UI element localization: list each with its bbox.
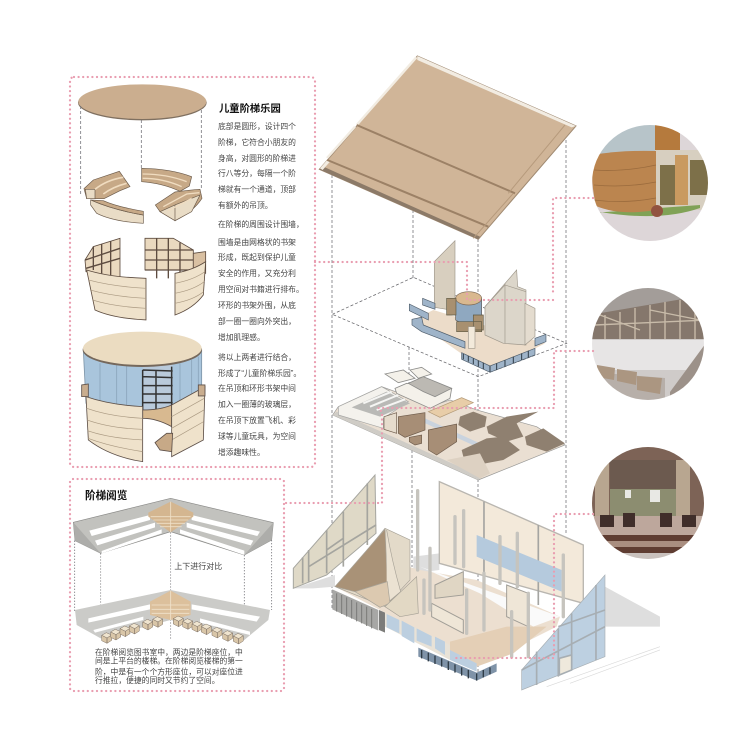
photo: children's playground render xyxy=(590,125,710,241)
ground shadows xyxy=(293,553,660,627)
columns xyxy=(418,491,563,657)
connector: shelf photo to reading panel xyxy=(284,351,593,503)
panel border xyxy=(70,77,315,467)
caption xyxy=(95,647,243,685)
furniture clusters xyxy=(458,412,565,465)
floor plane outline xyxy=(332,277,567,377)
dashed guide lines xyxy=(81,106,201,196)
slab xyxy=(333,387,565,480)
diagram: cylinder assembly xyxy=(78,84,207,462)
text block: description: 安全的作用，又充分利 xyxy=(218,268,296,278)
caption: 阶，中是有一个个方形座位，可以对座位进 xyxy=(95,666,243,676)
text block: description: 有额外的吊顶。 xyxy=(218,200,273,210)
heading: children's playground: 儿童阶梯乐园 xyxy=(219,102,281,115)
connector: lounge photo to ground floor xyxy=(455,514,593,658)
text block: description: 梯就有一个通道，顶部 xyxy=(218,184,296,194)
heading: stepped reading: 阶梯阅览 xyxy=(85,489,128,502)
photo: lounge view xyxy=(590,445,706,561)
text block: description: 在吊顶和环形书架中间 xyxy=(218,383,296,393)
panel: children's stepped playground xyxy=(70,77,315,467)
text block: description: 底部是圆形，设计四个 xyxy=(218,121,296,131)
entrance railing xyxy=(418,648,497,681)
text block: description: 身高，对圆形的阶梯进 xyxy=(218,153,296,163)
back wall xyxy=(439,482,583,605)
text block: description: 形成，既起到保护儿童 xyxy=(218,252,296,262)
text block: description: 在吊顶下放置飞机、彩 xyxy=(218,415,296,425)
text block: description: 在阶梯的周围设计围墙， xyxy=(218,219,304,229)
text block: description: 增加肌理感。 xyxy=(218,332,265,342)
stepped seats xyxy=(84,168,202,223)
glass and shelf assembly xyxy=(82,332,205,462)
ground floor level xyxy=(293,475,660,690)
lower stair view with seats xyxy=(75,590,270,644)
text block: description: 球等儿童玩具，为空间 xyxy=(218,431,296,441)
second floor level: children's area xyxy=(332,241,567,377)
roof slab xyxy=(319,56,576,239)
text block: description: 加入一圈薄的玻璃层， xyxy=(218,399,296,409)
dashed guides xyxy=(75,532,272,640)
caption: 间是上平台的楼梯。在阶梯阅览楼梯的第一 xyxy=(95,656,243,666)
text block: description: 形成了“儿童阶梯乐园”。 xyxy=(218,368,301,378)
caption: 行推拉，便捷的同时又节约了空间。 xyxy=(95,675,220,685)
model slab xyxy=(413,310,545,372)
left tall wall xyxy=(434,241,455,311)
caption: 在阶梯阅览图书室中，两边是阶梯座位，中 xyxy=(95,647,243,657)
right glass wall xyxy=(522,575,605,690)
text block: description: 用空间对书籍进行排布。 xyxy=(218,284,304,294)
text block: description xyxy=(218,121,304,457)
diagram: stair comparison xyxy=(73,498,273,685)
text block: description: 将以上两者进行结合， xyxy=(218,352,296,362)
connector: roof photo to playground panel xyxy=(315,198,593,300)
photo: stepped seating with shelf wall xyxy=(590,288,706,400)
upper mezzanine xyxy=(385,367,452,408)
right tall walls xyxy=(468,270,535,348)
text block: description: 围墙是由网格状的书架 xyxy=(218,237,296,247)
bookshelf ring xyxy=(85,238,206,320)
round children's room xyxy=(447,292,483,332)
first floor level: library shelves xyxy=(333,367,565,480)
blue shelf edges xyxy=(409,298,546,372)
blue clerestory band xyxy=(477,535,562,592)
floor plate xyxy=(335,560,560,667)
blue floor strip xyxy=(422,418,480,446)
comparison label: 上下进行对比 xyxy=(174,561,222,571)
bookshelf blocks xyxy=(384,413,457,455)
text block: description: 增添趣味性。 xyxy=(218,447,265,457)
panel border xyxy=(70,479,284,691)
facade xyxy=(332,589,477,672)
text block: description: 阶梯，它符合小朋友的 xyxy=(218,137,296,147)
text block: description: 部一圈一圈向外突出， xyxy=(218,316,296,326)
panel: stepped reading xyxy=(70,479,284,691)
ceiling disc xyxy=(78,84,207,120)
text block: description: 环形的书架外围，从底 xyxy=(218,300,296,310)
upper stair view xyxy=(73,498,273,555)
dashed explosion guides xyxy=(332,140,566,672)
stepped seating xyxy=(352,392,410,417)
left angled wall xyxy=(293,475,376,588)
wood platform xyxy=(428,398,473,417)
text block: description: 行八等分，每隔一个阶 xyxy=(218,168,296,178)
climbing wall xyxy=(335,528,418,617)
interior rooms xyxy=(432,572,547,667)
